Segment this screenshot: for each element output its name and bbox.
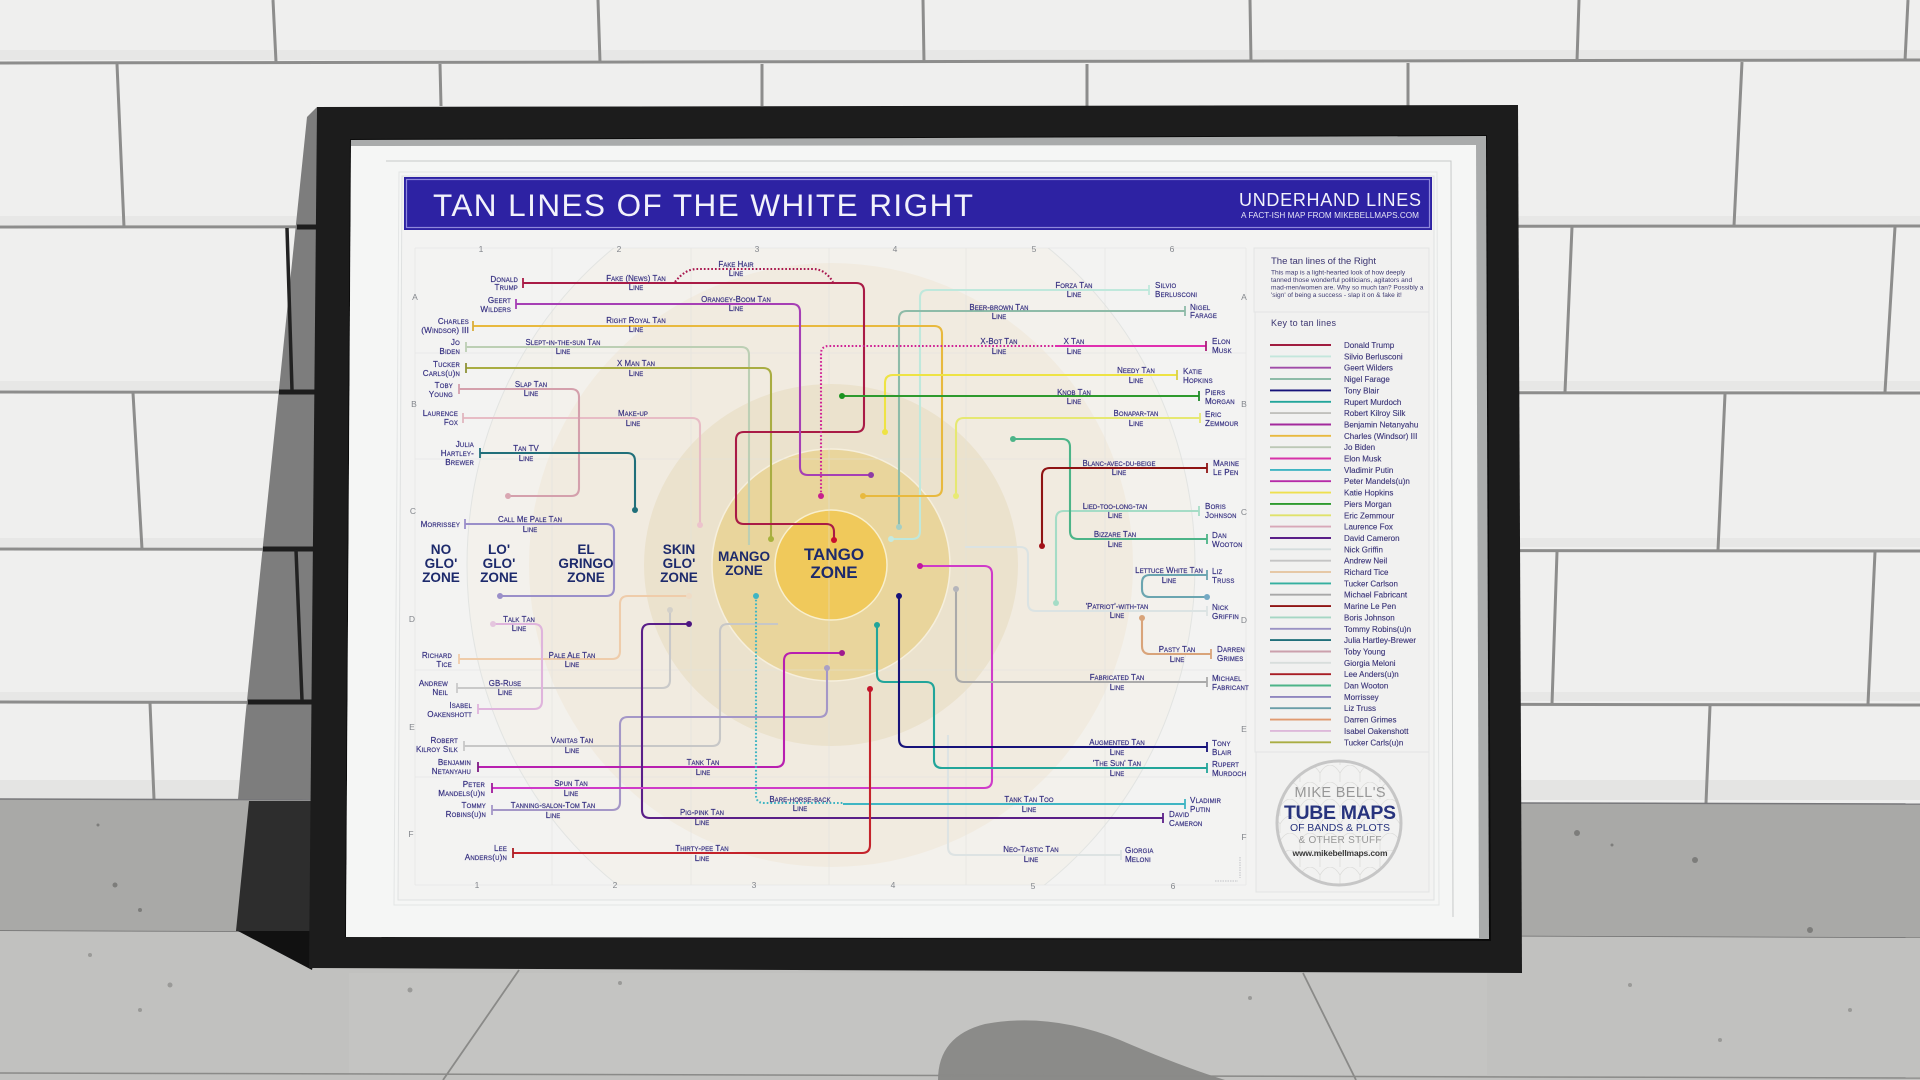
line: Silvio Berlusconi, Forza Tan: Silvio (1155, 281, 1177, 290)
line: Julia Hartley-Brewer, Tan TV: Tan TV (513, 444, 539, 453)
grid references: columns and rows: 2 (613, 880, 618, 890)
intro text: mad-men/women are. Why so much tan? Possibly a (1271, 284, 1424, 292)
key names: Peter Mandels(u)n (1344, 477, 1410, 486)
line: Morrissey, Call Me Pale Tan: Call Me Pale Tan (498, 515, 562, 524)
line: Charles Windsor, Right Royal Tan: Charles (438, 317, 469, 326)
line: Silvio Berlusconi, Forza Tan (888, 281, 1197, 542)
line: Lee Anderson, Thirty-pee Tan (465, 686, 873, 863)
line: Charles Windsor, Right Royal Tan: (Windsor) III (421, 326, 469, 335)
grid references: columns and rows: 3 (755, 244, 760, 254)
logo text (1284, 785, 1396, 858)
line: Geert Wilders, Orangey-Boom Tan: Wilders (480, 305, 511, 314)
line: Lee Anderson, Thirty-pee Tan: Thirty-pee Tan (675, 844, 729, 853)
key names: Eric Zemmour (1344, 511, 1395, 520)
intro text: tanned those wonderful politicians, agitators and (1271, 277, 1412, 284)
line: Elon Musk, X-Bot Tan and X Tan: X-Bot Tan (980, 337, 1018, 346)
grid references: columns and rows: F (408, 829, 414, 839)
line: Elon Musk, X-Bot Tan and X Tan: Line (992, 347, 1006, 356)
line: Marine Le Pen, Blanc-avec-du-beige: Marine (1213, 459, 1239, 468)
line: Richard Tice, Pale Ale Tan: Richard (422, 651, 452, 660)
zone label: mango zone: ZONE (725, 563, 763, 578)
intro text: 'sign' of being a success - slap it on & fake it! (1271, 292, 1402, 299)
line: Boris Johnson, Lied-too-long-tan: Boris (1205, 502, 1226, 511)
key names: Giorgia Meloni (1344, 659, 1396, 668)
line: Donald Trump, Fake (News) Tan and Fake Hair: Line (729, 269, 743, 278)
line: Geert Wilders, Orangey-Boom Tan: Orangey-Boom Tan (701, 295, 771, 304)
key names: Morrissey (1344, 693, 1379, 702)
grid references: columns and rows: 6 (1170, 244, 1175, 254)
line: Rupert Murdoch, The Sun Tan: Murdoch (1212, 769, 1246, 778)
line: Elon Musk, X-Bot Tan and X Tan: Line (1067, 347, 1081, 356)
line: Jo Biden, Slept-in-the-sun Tan: Line (556, 347, 570, 356)
line: Piers Morgan, Knob Tan (839, 388, 1235, 406)
line: Katie Hopkins, Needy Tan: Line (1129, 376, 1143, 385)
line: Vladimir Putin, Bare-horse-back and Tank Tan Too: Tank Tan Too (1004, 795, 1054, 804)
line: Laurence Fox, Make-up (423, 409, 703, 528)
line: Vladimir Putin, Bare-horse-back and Tank Tan Too: Line (793, 804, 807, 813)
grid references: columns and rows: B (411, 399, 417, 409)
line: Robert Kilroy Silk, Vanitas Tan: Line (565, 746, 579, 755)
line: Vladimir Putin, Bare-horse-back and Tank Tan Too: Vladimir (1190, 796, 1222, 805)
line: Laurence Fox, Make-up: Make-up (618, 409, 648, 418)
line: Rupert Murdoch, The Sun Tan: Line (1110, 769, 1124, 778)
line: Andrew Neil, GB-Ruse (419, 607, 673, 697)
line: Geert Wilders, Orangey-Boom Tan (480, 295, 874, 478)
background: concrete plinth (0, 799, 1920, 938)
line: Piers Morgan, Knob Tan: Knob Tan (1057, 388, 1091, 397)
line: Benjamin Netanyahu, Tank Tan: Tank Tan (687, 758, 719, 767)
line: Darren Grimes, Pasty Tan: Pasty Tan (1159, 645, 1195, 654)
line: Dan Wootton, Bizzare Tan: Wooton (1212, 540, 1243, 549)
intro heading: The tan lines of the Right (1271, 256, 1376, 267)
line: Liz Truss, Lettuce White Tan: Truss (1212, 576, 1235, 585)
zone label: no glo zone: ZONE (422, 570, 460, 585)
line: Donald Trump, Fake (News) Tan and Fake Hair: Line (629, 283, 643, 292)
line: Tony Blair, Augmented Tan: Tony (1212, 739, 1231, 748)
line: Nick Griffin, Patriot-with-tan: 'Patriot'-with-tan (1086, 602, 1148, 611)
key names: Boris Johnson (1344, 613, 1395, 622)
line: Elon Musk, X-Bot Tan and X Tan: Elon (1212, 337, 1230, 346)
zone label: no glo zone: NO (431, 542, 451, 557)
line: Katie Hopkins, Needy Tan: Hopkins (1183, 376, 1213, 385)
line: Richard Tice, Pale Ale Tan (422, 593, 692, 669)
grid references: columns and rows: B (1241, 399, 1247, 409)
line: Piers Morgan, Knob Tan: Morgan (1205, 397, 1235, 406)
key heading: Key to tan lines (1271, 318, 1336, 328)
background: floor (0, 931, 1920, 1080)
line: Silvio Berlusconi, Forza Tan: Berlusconi (1155, 290, 1197, 299)
line: Michael Fabricant, Fabricated Tan: Fabricant (1212, 683, 1249, 692)
grid references: columns and rows: 4 (893, 244, 898, 254)
frame shadow on wall (236, 107, 320, 970)
line: Liz Truss, Lettuce White Tan: Lettuce White Tan (1135, 566, 1203, 575)
key names: Katie Hopkins (1344, 489, 1393, 498)
line: Nigel Farage, Beer-brown Tan (896, 303, 1217, 530)
line: Liz Truss, Lettuce White Tan: Line (1162, 576, 1176, 585)
line: Marine Le Pen, Blanc-avec-du-beige: Blanc-avec-du-beige (1082, 459, 1156, 468)
line: Tony Blair, Augmented Tan: Augmented Tan (1089, 738, 1145, 747)
key names: Vladimir Putin (1344, 466, 1393, 475)
line: Liz Truss, Lettuce White Tan: Liz (1212, 567, 1223, 576)
line: David Cameron, Pig-pink Tan: Line (695, 818, 709, 827)
key names: Laurence Fox (1344, 523, 1393, 532)
line: David Cameron, Pig-pink Tan (642, 621, 1202, 828)
line: Toby Young, Slap Tan: Toby (435, 381, 453, 390)
line: Dan Wootton, Bizzare Tan (1010, 436, 1243, 549)
key names: Robert Kilroy Silk (1344, 409, 1406, 418)
line: Nick Griffin, Patriot-with-tan: Line (1110, 611, 1124, 620)
key names: Tony Blair (1344, 386, 1379, 395)
line: Tony Blair, Augmented Tan (896, 593, 1232, 757)
logo text: & OTHER STUFF (1298, 835, 1382, 846)
line: Peter Mandelson, Spun Tan: Line (564, 789, 578, 798)
line: Laurence Fox, Make-up: Fox (444, 418, 458, 427)
key names: Darren Grimes (1344, 716, 1396, 725)
grid references: columns and rows: 1 (475, 880, 480, 890)
line: Piers Morgan, Knob Tan: Line (1067, 397, 1081, 406)
zone label: mango zone: MANGO (718, 549, 770, 564)
grid references: columns and rows: 1 (479, 244, 484, 254)
key names: Nigel Farage (1344, 375, 1390, 384)
line: Julia Hartley-Brewer, Tan TV: Julia (456, 440, 474, 449)
key names: Andrew Neil (1344, 557, 1387, 566)
line: Isabel Oakenshott, Talk Tan (427, 615, 542, 719)
line: Eric Zemmour, Bonapar-tan (953, 409, 1239, 499)
line: Robert Kilroy Silk, Vanitas Tan: Kilroy Silk (416, 745, 458, 754)
panel: introduction (1254, 248, 1429, 312)
line: Richard Tice, Pale Ale Tan: Line (565, 660, 579, 669)
line: Elon Musk, X-Bot Tan and X Tan: Musk (1212, 346, 1232, 355)
map credits (1215, 857, 1240, 881)
line: Peter Mandelson, Spun Tan: Mandels(u)n (438, 789, 485, 798)
zone label: no glo zone: GLO' (425, 556, 457, 571)
zone label: lo glo zone: ZONE (480, 570, 518, 585)
line: Geert Wilders, Orangey-Boom Tan: Geert (488, 296, 511, 305)
key names: Benjamin Netanyahu (1344, 420, 1418, 430)
grid references: columns and rows: 3 (752, 880, 757, 890)
line: Tommy Robinson, Tanning-salon-Tom Tan: Tommy (461, 801, 486, 810)
key names: Tommy Robins(u)n (1344, 625, 1411, 634)
line: Morrissey, Call Me Pale Tan: Morrissey (421, 520, 460, 529)
grid references: columns and rows (408, 244, 1247, 891)
line: David Cameron, Pig-pink Tan: David (1169, 810, 1190, 819)
line: Tommy Robinson, Tanning-salon-Tom Tan: Tanning-salon-Tom Tan (511, 801, 595, 810)
line: Eric Zemmour, Bonapar-tan: Eric (1205, 410, 1222, 419)
line: Laurence Fox, Make-up: Line (626, 419, 640, 428)
line: Vladimir Putin, Bare-horse-back and Tank Tan Too: Putin (1190, 805, 1210, 814)
line: Nigel Farage, Beer-brown Tan: Farage (1190, 311, 1217, 320)
line: Tucker Carlson, X Man Tan: X Man Tan (617, 359, 655, 368)
line: Tucker Carlson, X Man Tan: Carls(u)n (423, 369, 460, 378)
line: Rupert Murdoch, The Sun Tan: 'The Sun' Tan (1093, 759, 1141, 768)
line: Katie Hopkins, Needy Tan: Katie (1183, 367, 1202, 376)
line: Boris Johnson, Lied-too-long-tan: Johnson (1205, 511, 1237, 520)
line: Julia Hartley-Brewer, Tan TV: Brewer (445, 458, 474, 467)
line: Morrissey, Call Me Pale Tan: Line (523, 525, 537, 534)
key names: Marine Le Pen (1344, 602, 1396, 611)
line: Nigel Farage, Beer-brown Tan: Nigel (1190, 303, 1211, 312)
line: Benjamin Netanyahu, Tank Tan: Netanyahu (432, 767, 471, 776)
line: Nick Griffin, Patriot-with-tan: Griffin (1212, 612, 1239, 621)
subtitle: A FACT-ISH MAP FROM MIKEBELLMAPS.COM (1241, 211, 1419, 220)
line: Laurence Fox, Make-up: Laurence (423, 409, 458, 418)
line: Tommy Robinson, Tanning-salon-Tom Tan: Robins(u)n (446, 810, 486, 819)
line: Michael Fabricant, Fabricated Tan (953, 586, 1249, 692)
line: Darren Grimes, Pasty Tan: Line (1170, 655, 1184, 664)
line: Jo Biden, Slept-in-the-sun Tan: Biden (439, 347, 460, 356)
key names: Dan Wooton (1344, 682, 1388, 690)
line: Darren Grimes, Pasty Tan (1139, 615, 1245, 664)
key names: Lee Anders(u)n (1344, 670, 1399, 679)
zone label: skin glo zone: GLO' (663, 556, 695, 571)
zone label: lo glo zone: LO' (488, 542, 510, 557)
grid references: columns and rows: E (1241, 724, 1247, 734)
logo text: www.mikebellmaps.com (1292, 848, 1388, 858)
line: Tucker Carlson, X Man Tan (423, 359, 774, 542)
line: Toby Young, Slap Tan: Slap Tan (515, 380, 547, 389)
line: Tony Blair, Augmented Tan: Line (1110, 748, 1124, 757)
line: Benjamin Netanyahu, Tank Tan: Benjamin (438, 758, 471, 767)
line: Julia Hartley-Brewer, Tan TV (441, 440, 638, 513)
line: David Cameron, Pig-pink Tan: Cameron (1169, 819, 1202, 828)
grid references: columns and rows: A (412, 292, 418, 302)
line: Peter Mandelson, Spun Tan: Peter (463, 780, 485, 789)
key names: Piers Morgan (1344, 500, 1392, 509)
line: Boris Johnson, Lied-too-long-tan: Lied-too-long-tan (1083, 502, 1147, 511)
line: Donald Trump, Fake (News) Tan and Fake Hair: Fake (News) Tan (606, 274, 666, 283)
line: Vladimir Putin, Bare-horse-back and Tank Tan Too (753, 593, 1222, 814)
zone label: el gringo zone: GRINGO (558, 556, 614, 571)
line: Lee Anderson, Thirty-pee Tan: Lee (494, 844, 507, 853)
line: Silvio Berlusconi, Forza Tan: Forza Tan (1055, 281, 1093, 290)
line: Michael Fabricant, Fabricated Tan: Fabricated Tan (1090, 673, 1144, 682)
key names (1344, 341, 1418, 747)
line: Darren Grimes, Pasty Tan: Darren (1217, 645, 1245, 654)
zone rings (466, 248, 1196, 885)
line: Morrissey, Call Me Pale Tan (421, 515, 614, 599)
zone label: lo glo zone: GLO' (483, 556, 515, 571)
line: Marine Le Pen, Blanc-avec-du-beige (1039, 459, 1239, 549)
line: Jo Biden, Slept-in-the-sun Tan: Jo (451, 338, 460, 347)
line: Richard Tice, Pale Ale Tan: Pale Ale Tan (549, 651, 595, 660)
line: Nick Griffin, Patriot-with-tan (965, 547, 1239, 621)
line: Giorgia Meloni, Neo-Tastic Tan (948, 735, 1154, 864)
key names: David Cameron (1344, 534, 1400, 543)
line: Toby Young, Slap Tan: Young (429, 390, 453, 399)
line: Benjamin Netanyahu, Tank Tan: Line (696, 768, 710, 777)
zone label: skin glo zone: ZONE (660, 570, 698, 585)
line: Darren Grimes, Pasty Tan: Grimes (1217, 654, 1243, 663)
key names: Jo Biden (1344, 443, 1375, 452)
line: Dan Wootton, Bizzare Tan: Dan (1212, 531, 1227, 540)
line: Elon Musk, X-Bot Tan and X Tan (818, 337, 1232, 499)
line: Charles Windsor, Right Royal Tan (421, 316, 942, 499)
logo text: MIKE BELL'S (1294, 785, 1386, 801)
key names: Tucker Carlson (1344, 579, 1398, 588)
key names: Rupert Murdoch (1344, 398, 1401, 407)
map grid (415, 248, 1246, 885)
grid references: columns and rows: 5 (1032, 244, 1037, 254)
title band (404, 177, 1432, 230)
line: Julia Hartley-Brewer, Tan TV: Hartley- (441, 449, 474, 458)
zone label: el gringo zone: EL (577, 542, 595, 557)
grid references: columns and rows: F (1241, 832, 1247, 842)
key names: Richard Tice (1344, 568, 1389, 577)
line: Giorgia Meloni, Neo-Tastic Tan: Meloni (1125, 855, 1151, 864)
line: Tucker Carlson, X Man Tan: Tucker (433, 360, 460, 369)
line: Peter Mandelson, Spun Tan (438, 563, 992, 798)
zone label: tango zone: ZONE (810, 563, 858, 582)
line: Eric Zemmour, Bonapar-tan: Bonapar-tan (1114, 409, 1158, 418)
line: Isabel Oakenshott, Talk Tan: Oakenshott (427, 710, 472, 719)
line: Giorgia Meloni, Neo-Tastic Tan: Giorgia (1125, 846, 1154, 855)
background: tiled wall (0, 0, 1920, 804)
line: Lee Anderson, Thirty-pee Tan: Anders(u)n (465, 853, 507, 862)
line: Isabel Oakenshott, Talk Tan: Isabel (449, 701, 472, 710)
line: Vladimir Putin, Bare-horse-back and Tank Tan Too: Line (1022, 805, 1036, 814)
line: Giorgia Meloni, Neo-Tastic Tan: Line (1024, 855, 1038, 864)
line: Vladimir Putin, Bare-horse-back and Tank Tan Too: Bare-horse-back (769, 795, 831, 804)
line: Piers Morgan, Knob Tan: Piers (1205, 388, 1225, 397)
line: Tony Blair, Augmented Tan: Blair (1212, 748, 1232, 757)
line: Toby Young, Slap Tan: Line (524, 389, 538, 398)
line: Dan Wootton, Bizzare Tan: Bizzare Tan (1094, 530, 1136, 539)
line: Giorgia Meloni, Neo-Tastic Tan: Neo-Tastic Tan (1003, 845, 1059, 854)
line: Andrew Neil, GB-Ruse: Andrew (419, 679, 448, 688)
line: Marine Le Pen, Blanc-avec-du-beige: Line (1112, 468, 1126, 477)
grid references: columns and rows: A (1241, 292, 1247, 302)
line: Robert Kilroy Silk, Vanitas Tan (416, 624, 778, 755)
line: David Cameron, Pig-pink Tan: Pig-pink Tan (680, 808, 724, 817)
logo text: OF BANDS & PLOTS (1290, 822, 1390, 834)
line: Marine Le Pen, Blanc-avec-du-beige: Le Pen (1213, 468, 1239, 477)
key names: Charles (Windsor) III (1344, 432, 1417, 441)
line: Rupert Murdoch, The Sun Tan: Rupert (1212, 760, 1239, 769)
grid references: columns and rows: 5 (1031, 881, 1036, 891)
line: Charles Windsor, Right Royal Tan: Line (629, 325, 643, 334)
picture frame (309, 105, 1522, 973)
panel: logo (1256, 752, 1429, 892)
key names: Donald Trump (1344, 341, 1395, 350)
line: Silvio Berlusconi, Forza Tan: Line (1067, 290, 1081, 299)
key names: Geert Wilders (1344, 364, 1393, 373)
line: Eric Zemmour, Bonapar-tan: Zemmour (1205, 419, 1239, 428)
line: Donald Trump, Fake (News) Tan and Fake Hair (490, 260, 864, 543)
line: Donald Trump, Fake (News) Tan and Fake Hair: Donald (490, 275, 518, 284)
paper mat (346, 145, 1479, 938)
line: Robert Kilroy Silk, Vanitas Tan: Vanitas Tan (551, 736, 593, 745)
key names: Elon Musk (1344, 454, 1382, 464)
line: Peter Mandelson, Spun Tan: Spun Tan (554, 779, 588, 788)
key names: Michael Fabricant (1344, 591, 1408, 600)
zone label: tango zone: TANGO (804, 545, 864, 564)
zone label: el gringo zone: ZONE (567, 570, 605, 585)
line: Jo Biden, Slept-in-the-sun Tan (439, 338, 749, 545)
line: Nick Griffin, Patriot-with-tan: Nick (1212, 603, 1229, 612)
grid references: columns and rows: D (409, 614, 415, 624)
line: Lee Anderson, Thirty-pee Tan: Line (695, 854, 709, 863)
line: Nigel Farage, Beer-brown Tan: Beer-brown Tan (969, 303, 1029, 312)
line: Julia Hartley-Brewer, Tan TV: Line (519, 454, 533, 463)
series title: UNDERHAND LINES (1239, 190, 1421, 210)
line: Boris Johnson, Lied-too-long-tan (1053, 502, 1237, 606)
line: Michael Fabricant, Fabricated Tan: Michael (1212, 674, 1242, 683)
key names: Liz Truss (1344, 704, 1376, 713)
line: Richard Tice, Pale Ale Tan: Tice (436, 660, 452, 669)
line: Robert Kilroy Silk, Vanitas Tan: Robert (430, 736, 458, 745)
zone label: skin glo zone: SKIN (663, 542, 695, 557)
line: Toby Young, Slap Tan (429, 380, 579, 499)
grid references: columns and rows: C (1241, 507, 1247, 517)
key names: Nick Griffin (1344, 545, 1383, 554)
title: TAN LINES OF THE WHITE RIGHT (433, 187, 973, 223)
grid references: columns and rows: E (409, 722, 415, 732)
panel: key to tan lines (1255, 312, 1429, 752)
grid references: columns and rows: D (1241, 615, 1247, 625)
line: Tommy Robinson, Tanning-salon-Tom Tan (446, 665, 830, 820)
line: Donald Trump, Fake (News) Tan and Fake Hair: Trump (494, 283, 518, 292)
key names: Julia Hartley-Brewer (1344, 636, 1416, 645)
line: Boris Johnson, Lied-too-long-tan: Line (1108, 511, 1122, 520)
line: Geert Wilders, Orangey-Boom Tan: Line (729, 304, 743, 313)
line: Benjamin Netanyahu, Tank Tan (432, 650, 845, 777)
intro text: This map is a light-hearted look of how deeply (1271, 270, 1406, 276)
line: Andrew Neil, GB-Ruse: GB-Ruse (489, 679, 521, 688)
grid references: columns and rows: C (410, 506, 416, 516)
grid references: columns and rows: 4 (891, 880, 896, 890)
key names: Tucker Carls(u)n (1344, 738, 1403, 747)
line: Katie Hopkins, Needy Tan (882, 366, 1213, 435)
line: Elon Musk, X-Bot Tan and X Tan: X Tan (1064, 337, 1084, 346)
key swatches (1270, 345, 1331, 742)
line: Rupert Murdoch, The Sun Tan (874, 622, 1246, 778)
grid references: columns and rows: 2 (617, 244, 622, 254)
line: Katie Hopkins, Needy Tan: Needy Tan (1117, 366, 1155, 375)
line: Michael Fabricant, Fabricated Tan: Line (1110, 683, 1124, 692)
line: Eric Zemmour, Bonapar-tan: Line (1129, 419, 1143, 428)
logo text: TUBE MAPS (1284, 802, 1396, 824)
line: Donald Trump, Fake (News) Tan and Fake Hair: Fake Hair (718, 260, 754, 269)
key names: Silvio Berlusconi (1344, 352, 1403, 361)
line: Liz Truss, Lettuce White Tan (1135, 566, 1235, 600)
key names: Toby Young (1344, 648, 1385, 656)
line: Andrew Neil, GB-Ruse: Neil (432, 688, 448, 697)
line: Charles Windsor, Right Royal Tan: Right Royal Tan (606, 316, 666, 325)
line: Tommy Robinson, Tanning-salon-Tom Tan: Line (546, 811, 560, 820)
line: Dan Wootton, Bizzare Tan: Line (1108, 540, 1122, 549)
grid references: columns and rows: 6 (1171, 881, 1176, 891)
line: Jo Biden, Slept-in-the-sun Tan: Slept-in-the-sun Tan (525, 338, 601, 347)
line: Nigel Farage, Beer-brown Tan: Line (992, 312, 1006, 321)
line: Isabel Oakenshott, Talk Tan: Line (512, 624, 526, 633)
key names: Isabel Oakenshott (1344, 727, 1409, 736)
line: Andrew Neil, GB-Ruse: Line (498, 688, 512, 697)
line: Tucker Carlson, X Man Tan: Line (629, 369, 643, 378)
line: Isabel Oakenshott, Talk Tan: Talk Tan (503, 615, 535, 624)
